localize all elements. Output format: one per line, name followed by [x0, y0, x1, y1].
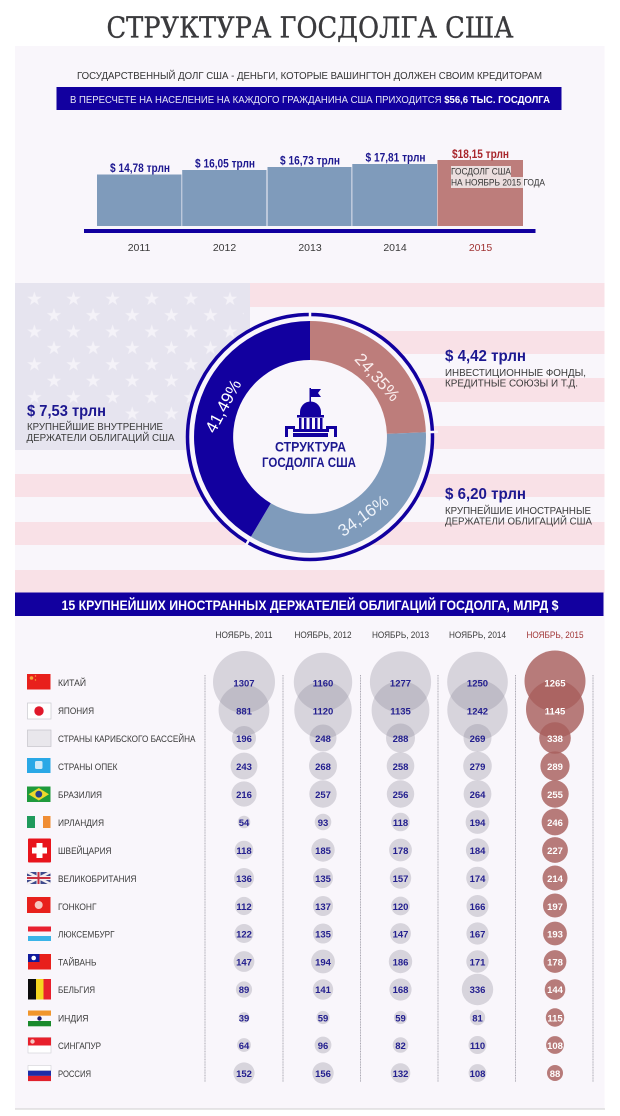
bubbles 2013: 168	[393, 985, 408, 996]
icon: flag OPEC	[27, 758, 50, 773]
icon: flag India	[28, 1010, 51, 1026]
bubbles 2015: 214	[547, 874, 564, 885]
country labels: ИРЛАНДИЯ	[58, 818, 104, 828]
bar chart: national debt 2011-2015: $18,15 трлн	[452, 147, 509, 161]
bubbles 2012: 96	[318, 1041, 328, 1052]
bubbles 2011: 54	[239, 818, 250, 829]
bubbles 2011: 1307	[233, 678, 255, 690]
callout: funds: КРЕДИТНЫЕ СОЮЗЫ И Т.Д.	[445, 378, 578, 390]
bar chart: national debt 2011-2015: $ 16,05 трлн	[195, 156, 255, 170]
bar note	[451, 166, 545, 188]
column headers	[216, 630, 584, 640]
bubbles 2014: 336	[470, 985, 485, 996]
bubbles 2012: 1160	[313, 678, 333, 690]
bubbles 2013: 118	[393, 818, 408, 829]
callout: foreign: $ 6,20 трлн	[445, 486, 526, 503]
country labels: КИТАЙ	[58, 677, 86, 688]
column headers: НОЯБРЬ, 2011	[216, 630, 272, 640]
bubbles 2014: 174	[470, 874, 486, 885]
bubbles 2013: 288	[393, 734, 408, 745]
bubbles 2015: 115	[547, 1014, 563, 1024]
callout: funds: ИНВЕСТИЦИОННЫЕ ФОНДЫ,	[445, 367, 586, 379]
bubbles 2015: 227	[547, 846, 563, 857]
intro text: ГОСУДАРСТВЕННЫЙ ДОЛГ США - ДЕНЬГИ, КОТОРЫЕ ВАШИНГТОН ДОЛЖЕН СВОИМ КРЕДИТОРАМ	[77, 69, 542, 82]
callout: foreign	[445, 486, 592, 528]
icon: flag Ireland	[27, 816, 50, 828]
bubbles 2014: 279	[470, 762, 485, 773]
bubbles 2015: 178	[547, 958, 563, 968]
country labels: РОССИЯ	[58, 1069, 91, 1079]
bubbles 2012: 93	[318, 818, 328, 829]
bubbles 2011: 122	[236, 930, 252, 940]
bubbles 2012: 156	[315, 1069, 331, 1080]
country labels	[58, 677, 196, 1079]
bubbles 2015: 197	[547, 902, 563, 913]
bubbles 2013: 147	[393, 930, 408, 940]
bubbles 2013	[370, 651, 431, 1083]
bubbles 2013: 157	[393, 874, 408, 885]
bubbles 2015: 246	[547, 818, 563, 829]
bubbles 2011: 89	[239, 985, 249, 996]
country labels: СТРАНЫ КАРИБСКОГО БАССЕЙНА	[58, 733, 196, 744]
bar note: ГОСДОЛГ США	[451, 166, 511, 176]
column headers: НОЯБРЬ, 2013	[372, 630, 429, 640]
icon: flag Taiwan	[28, 954, 51, 970]
donut center label	[262, 438, 356, 470]
icon: flag China	[27, 674, 50, 690]
icon: flag Hong Kong	[27, 897, 50, 913]
bar chart: national debt 2011-2015	[84, 147, 545, 254]
bubbles 2014: 166	[470, 902, 485, 913]
column headers: НОЯБРЬ, 2014	[449, 630, 506, 640]
bubbles 2013: 1277	[390, 678, 411, 690]
callout: domestic: ДЕРЖАТЕЛИ ОБЛИГАЦИЙ США	[26, 431, 174, 444]
bottom rule	[15, 1108, 605, 1110]
country labels: БРАЗИЛИЯ	[58, 790, 102, 800]
bubbles 2014: 108	[470, 1069, 485, 1080]
bubbles 2012: 248	[315, 734, 331, 745]
callout: domestic	[26, 403, 174, 444]
bar chart: national debt 2011-2015: 2014	[383, 242, 407, 254]
callout: domestic: $ 7,53 трлн	[27, 403, 106, 420]
bubbles 2011: 147	[236, 958, 252, 968]
bubbles 2012: 137	[315, 902, 331, 913]
column headers: НОЯБРЬ, 2012	[294, 630, 352, 640]
bubbles 2013: 120	[393, 902, 408, 913]
country labels: БЕЛЬГИЯ	[58, 985, 95, 995]
bubbles 2011: 118	[236, 846, 252, 857]
bubbles 2011: 39	[239, 1014, 249, 1024]
bubbles 2014	[447, 652, 508, 1082]
bubbles 2013: 186	[393, 958, 408, 968]
donut chart: 41,49%	[202, 376, 245, 436]
flag background	[15, 283, 604, 593]
bubbles 2011: 152	[236, 1069, 252, 1080]
bubbles 2015: 88	[550, 1069, 560, 1080]
bubbles 2013: 82	[395, 1041, 406, 1052]
country labels: ГОНКОНГ	[58, 902, 97, 912]
country labels: ЛЮКСЕМБУРГ	[58, 930, 115, 940]
bubbles 2015: 338	[547, 734, 563, 745]
bar chart: national debt 2011-2015: 2015	[469, 242, 492, 254]
bubbles 2012	[294, 653, 352, 1084]
donut chart: 34,16%	[334, 491, 392, 541]
country labels: ИНДИЯ	[58, 1014, 88, 1024]
bubbles 2011: 64	[239, 1041, 250, 1052]
icon: flag Switzerland	[28, 838, 51, 862]
bubbles 2011: 216	[236, 790, 252, 801]
bubbles 2015: 289	[547, 762, 563, 773]
donut chart: 24,35%	[351, 350, 403, 405]
bubbles 2013: 1135	[390, 706, 412, 718]
bubbles 2013: 256	[393, 790, 408, 801]
bubbles 2014: 269	[470, 734, 485, 745]
bubbles 2012: 141	[315, 985, 332, 996]
icon: flag Belgium	[28, 979, 51, 1000]
column headers: НОЯБРЬ, 2015	[526, 630, 584, 640]
table heading: 15 КРУПНЕЙШИХ ИНОСТРАННЫХ ДЕРЖАТЕЛЕЙ ОБЛИГАЦИЙ ГОСДОЛГА, МЛРД $	[62, 596, 559, 613]
banner: per-citizen debt: В ПЕРЕСЧЕТЕ НА НАСЕЛЕНИЕ НА КАЖДОГО ГРАЖДАНИНА США ПРИХОДИТСЯ $56,6 ТЫС. ГОСДОЛГА	[70, 94, 550, 106]
bubbles 2014: 264	[470, 790, 486, 801]
bubbles 2015: 144	[547, 985, 564, 996]
bubbles 2015: 108	[547, 1041, 563, 1052]
bubbles 2012: 1120	[313, 706, 333, 718]
bubbles 2015: 1265	[544, 678, 566, 690]
bubbles 2014: 194	[470, 818, 486, 829]
bubbles 2012: 194	[315, 958, 332, 968]
country labels: ЯПОНИЯ	[58, 706, 94, 716]
bar chart: national debt 2011-2015: 2011	[128, 242, 150, 254]
bar note: НА НОЯБРЬ 2015 ГОДА	[451, 178, 545, 188]
title: СТРУКТУРА ГОСДОЛГА США	[106, 10, 514, 44]
bubbles 2011: 196	[236, 734, 252, 745]
callout: foreign: КРУПНЕЙШИЕ ИНОСТРАННЫЕ	[445, 504, 591, 517]
icon: flag Russia	[28, 1066, 51, 1081]
callout: foreign: ДЕРЖАТЕЛИ ОБЛИГАЦИЙ США	[445, 514, 592, 528]
donut chart	[188, 310, 438, 560]
icon: flag Japan	[28, 703, 51, 719]
donut center label: СТРУКТУРА	[275, 438, 346, 454]
icon: flag Brazil	[27, 786, 50, 802]
icon: capitol	[285, 388, 337, 437]
icon: flag Luxembourg	[28, 926, 51, 941]
bubbles 2012: 268	[315, 762, 331, 773]
icon: flag Singapore	[28, 1038, 51, 1053]
bubbles 2014: 81	[472, 1014, 483, 1024]
bar chart: national debt 2011-2015: 2013	[298, 242, 322, 254]
bubbles 2012: 59	[318, 1014, 328, 1024]
bubbles 2012: 135	[315, 874, 332, 885]
bubbles 2012: 185	[315, 846, 332, 857]
bubbles 2011: 112	[236, 902, 252, 913]
bar chart: national debt 2011-2015: $ 14,78 трлн	[110, 161, 170, 175]
callout: funds: $ 4,42 трлн	[445, 348, 526, 365]
bubbles 2013: 178	[393, 846, 408, 857]
country labels: СИНГАПУР	[58, 1041, 101, 1051]
bubbles 2015: 255	[547, 790, 564, 801]
bubbles 2012: 135	[315, 930, 332, 940]
bar chart: national debt 2011-2015: 2012	[213, 242, 236, 254]
bubbles 2011	[213, 651, 275, 1084]
donut center label: ГОСДОЛГА США	[262, 454, 356, 470]
bubbles 2014: 167	[470, 930, 485, 940]
bubbles 2015: 1145	[545, 706, 566, 718]
bubbles 2014: 1242	[467, 706, 488, 718]
bubbles 2014: 110	[470, 1041, 485, 1052]
icon: flag UK	[27, 872, 50, 884]
bubbles 2015: 193	[547, 930, 563, 940]
bubbles 2015	[524, 650, 586, 1081]
bubbles 2013: 59	[395, 1014, 406, 1024]
banner: per-citizen debt	[56, 87, 562, 110]
bubbles 2014: 184	[470, 846, 486, 857]
bubbles 2011: 881	[236, 706, 253, 718]
table heading	[15, 592, 604, 616]
bubbles 2012: 257	[315, 790, 331, 801]
callout: funds	[445, 348, 586, 390]
bar chart: national debt 2011-2015: $ 16,73 трлн	[280, 154, 340, 168]
bubbles 2011: 136	[236, 874, 252, 885]
bubbles 2014: 1250	[467, 678, 488, 690]
callout: domestic: КРУПНЕЙШИЕ ВНУТРЕННИЕ	[27, 420, 163, 433]
bar chart: national debt 2011-2015: $ 17,81 трлн	[366, 150, 426, 164]
bubbles 2013: 258	[393, 762, 408, 773]
icon: flag Caribbean	[28, 730, 51, 746]
bubbles 2011: 243	[236, 762, 252, 773]
country labels: ТАЙВАНЬ	[58, 956, 97, 968]
country labels: ВЕЛИКОБРИТАНИЯ	[58, 874, 136, 884]
country labels: ШВЕЙЦАРИЯ	[58, 845, 112, 856]
country labels: СТРАНЫ ОПЕК	[58, 762, 118, 772]
bubbles 2014: 171	[470, 958, 486, 968]
bubbles 2013: 132	[393, 1069, 408, 1080]
